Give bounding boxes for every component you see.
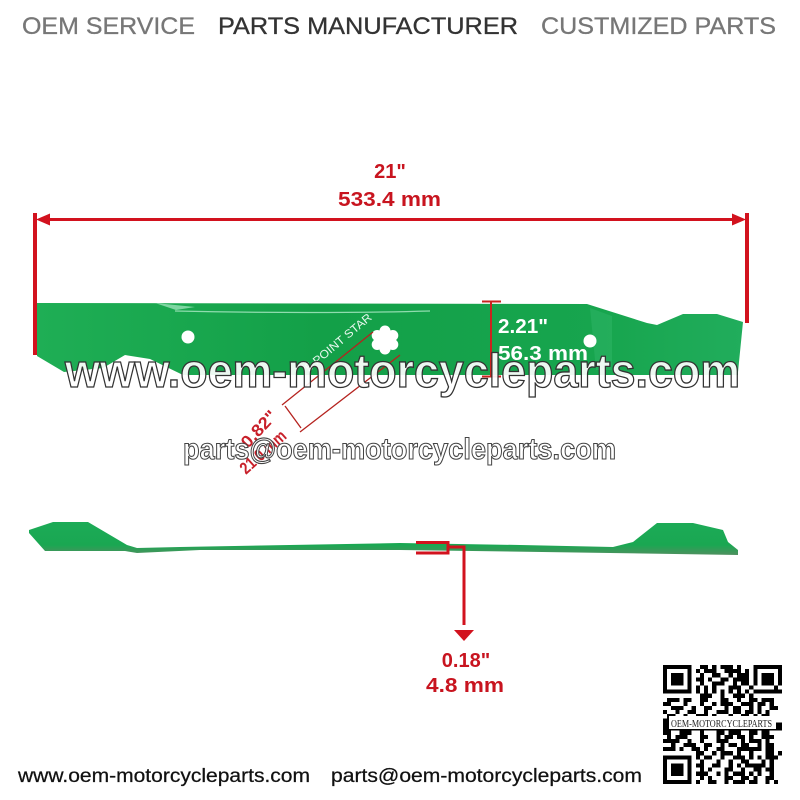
QR caption: OEM-MOTORCYCLEPARTS: [671, 719, 772, 730]
header: customized parts: CUSTMIZED PARTS: [541, 13, 776, 40]
length dimension 21 in: 533.4 mm: [338, 189, 441, 211]
footer: website: www.oem-motorcycleparts.com: [17, 766, 310, 787]
length dimension 21 in: [33, 161, 749, 355]
watermark: website: www.oem-motorcycleparts.com: [64, 344, 740, 397]
thickness arrowhead: [454, 630, 474, 641]
header tagline: [22, 13, 776, 40]
star size dimension: [236, 332, 400, 478]
thickness dimension 0.18 in: 4.8 mm: [426, 675, 504, 697]
star label: 5 POINT STAR: [303, 312, 375, 374]
star size dimension: 21.0 mm: [236, 426, 290, 478]
width dimension 2.21 in: [482, 302, 588, 376]
length label: 21": [374, 161, 406, 183]
star hole: [372, 326, 398, 354]
header: OEM service: OEM SERVICE: [22, 13, 195, 40]
header: parts manufacturer: PARTS MANUFACTURER: [218, 13, 518, 40]
watermark: email: parts@oem-motorcycleparts.com: [183, 433, 616, 466]
thickness label: 0.18": [442, 650, 490, 672]
footer contacts: [17, 766, 642, 787]
mounting holes: [182, 330, 194, 344]
width label: 2.21": [498, 316, 548, 338]
blade top view: [37, 303, 743, 375]
star size label: 0.82": [237, 407, 281, 452]
blade body: [37, 303, 743, 375]
QR code: [663, 667, 782, 782]
thickness dimension 0.18 in: [416, 542, 504, 697]
width dimension 2.21 in: 56.3 mm: [498, 343, 588, 365]
footer: email: parts@oem-motorcycleparts.com: [331, 766, 642, 787]
blade side view: [29, 522, 738, 555]
